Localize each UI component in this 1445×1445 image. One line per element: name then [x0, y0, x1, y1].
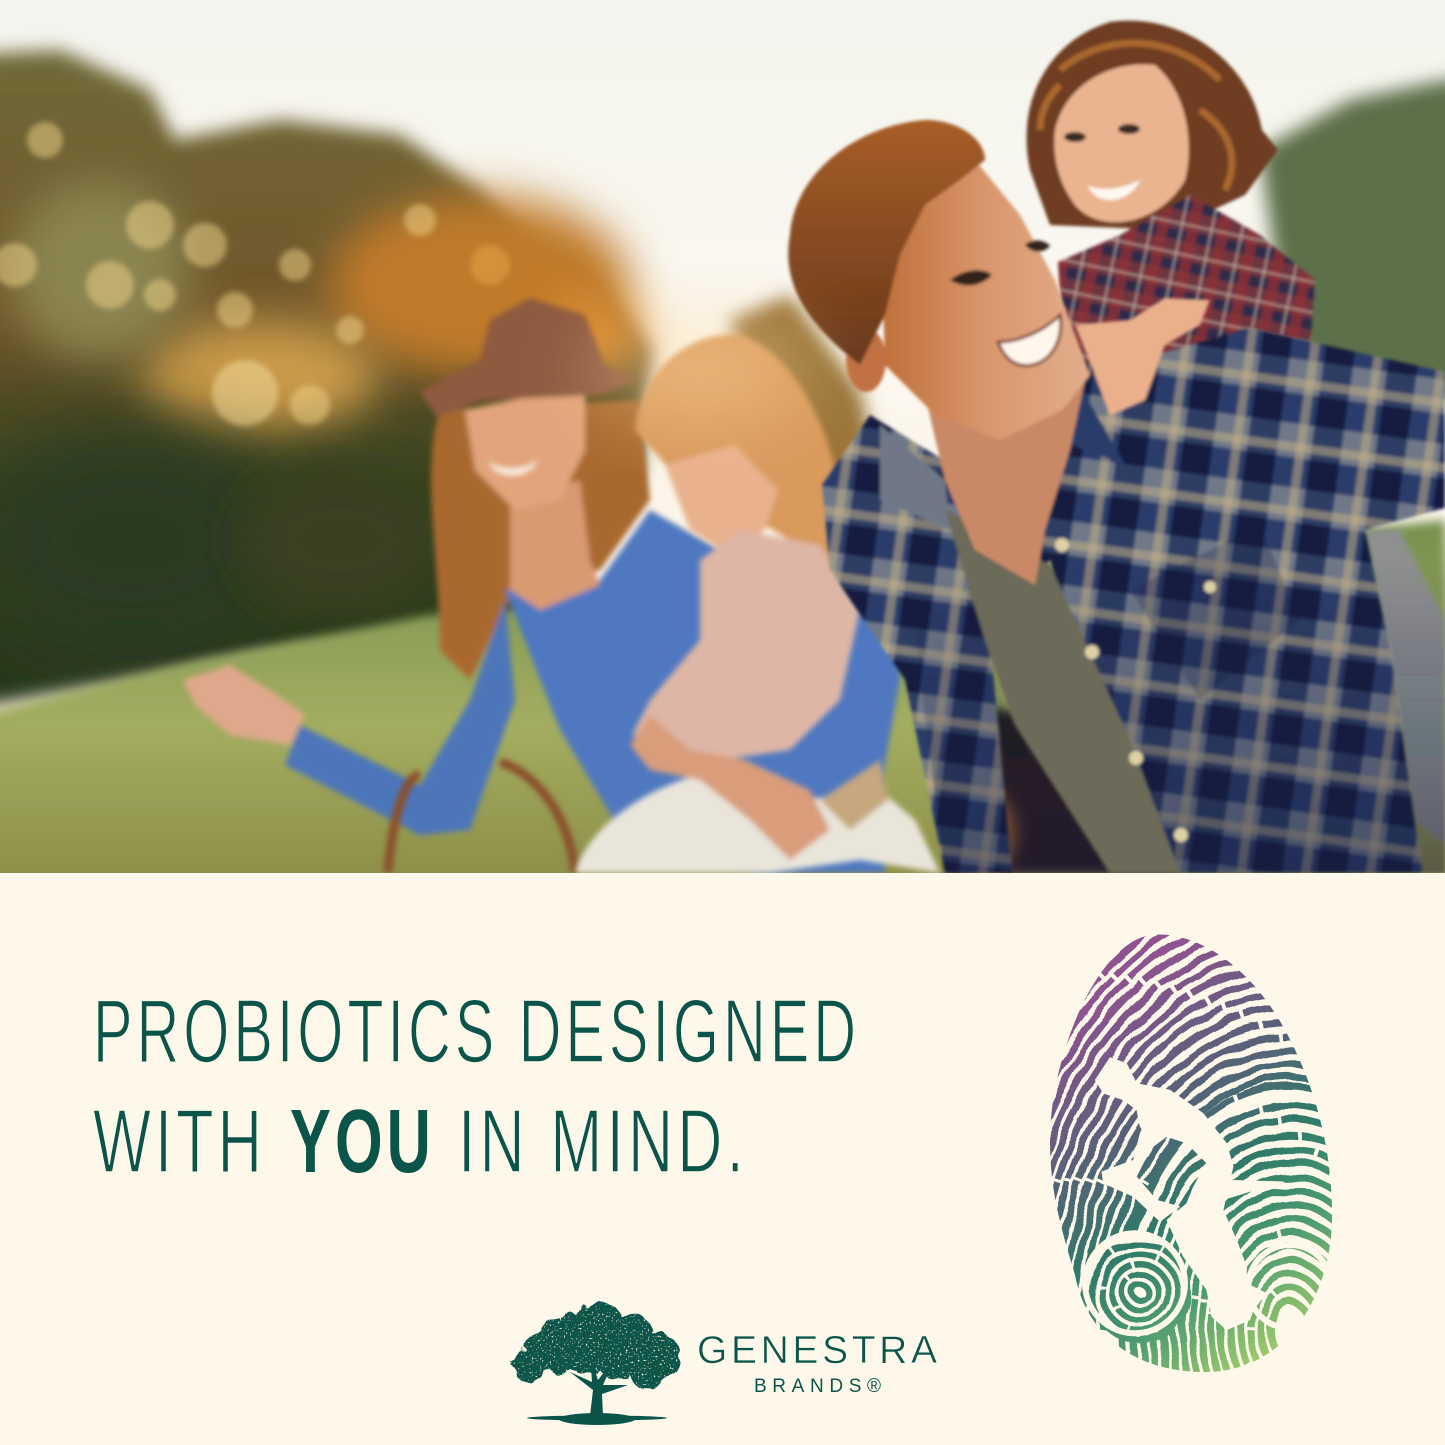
headline line 2: with: WITH — [93, 1092, 266, 1192]
man — [788, 120, 1445, 873]
tree crown — [513, 1301, 680, 1390]
dark gap with glow — [950, 700, 1180, 873]
hair — [635, 335, 860, 590]
rider arm — [1102, 1120, 1180, 1222]
left collar — [880, 425, 950, 530]
cyclist silhouette — [1085, 1057, 1332, 1333]
boy legs — [1365, 530, 1445, 845]
icon: tree — [513, 1301, 680, 1425]
face — [880, 160, 1090, 440]
neck — [510, 480, 600, 610]
bokeh highlights — [0, 122, 510, 426]
grass field — [0, 520, 1445, 893]
wordmark: GENESTRA — [697, 1329, 937, 1372]
right collar — [1060, 385, 1125, 465]
eyes — [950, 241, 1050, 285]
trunk and branches — [570, 1355, 628, 1416]
rear wheel fill — [1085, 1233, 1185, 1333]
red plaid shirt — [1056, 194, 1316, 376]
girl held by woman — [575, 335, 940, 873]
hair — [431, 400, 650, 680]
sky — [0, 0, 1445, 98]
rider head and back — [1095, 1057, 1267, 1330]
sun haze — [590, 320, 810, 420]
smile — [488, 460, 538, 475]
hand — [183, 665, 305, 745]
plaid shirt — [822, 328, 1445, 873]
hair — [1027, 21, 1278, 230]
boy hand on shoulder — [1075, 298, 1210, 415]
white trousers — [575, 770, 940, 873]
hat — [420, 298, 635, 418]
bike frame — [1227, 1180, 1287, 1198]
headline — [93, 982, 860, 1192]
shirt pocket — [1133, 540, 1298, 700]
logo: Genestra Brands — [513, 1301, 937, 1425]
pink sweater — [632, 530, 860, 760]
headline line 2: in mind: IN MIND. — [458, 1092, 748, 1192]
hair — [788, 120, 985, 365]
belly band — [820, 760, 888, 830]
t-shirt — [945, 510, 1180, 873]
shirt lower shading — [917, 593, 1445, 873]
ground mound — [559, 1413, 635, 1425]
headline line 1: PROBIOTICS DESIGNED — [93, 982, 860, 1082]
photo: family outdoors at sunset — [0, 0, 1445, 893]
rear wheel ridges — [1092, 1244, 1188, 1340]
ear — [846, 328, 886, 392]
basket handle — [388, 762, 575, 873]
boy on shoulders — [1027, 21, 1315, 420]
face — [465, 385, 585, 510]
ground shadow — [527, 1416, 667, 1420]
front wheel — [1248, 1245, 1332, 1328]
face — [1054, 64, 1189, 222]
hair highlights — [1040, 43, 1232, 190]
blue top — [505, 510, 900, 873]
fingerprint with cyclist — [967, 868, 1440, 1440]
face — [665, 445, 778, 552]
fingerprint ridges — [967, 868, 1440, 1440]
headline line 2: you: YOU — [290, 1092, 435, 1192]
rear wheel — [1085, 1233, 1185, 1333]
neck — [925, 380, 1085, 585]
hands — [630, 715, 830, 860]
eyes and smile — [1064, 124, 1140, 200]
arm — [285, 600, 515, 835]
open smile — [998, 315, 1061, 366]
woman with hat — [183, 298, 900, 873]
background trees — [0, 50, 1445, 710]
shirt buttons — [1055, 538, 1216, 842]
sub-wordmark: BRANDS® — [754, 1376, 881, 1397]
